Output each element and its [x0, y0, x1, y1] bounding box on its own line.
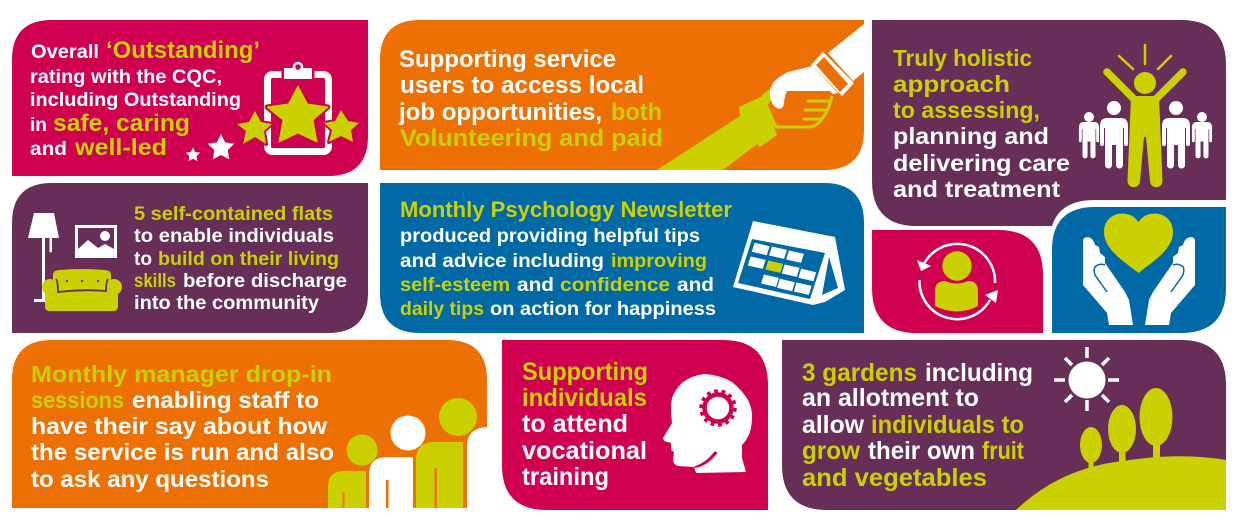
text: gardens — [802, 359, 1033, 492]
text: flats: to enable individuals — [134, 226, 334, 247]
icon: person in circular arrows — [917, 244, 998, 319]
text: holistic approach: planning and — [893, 123, 1049, 149]
text: drop-in sessions: sessions — [31, 387, 124, 413]
text: CQC rating: ‘Outstanding’ — [106, 37, 260, 64]
text: flats: 5 self-contained flats — [134, 204, 333, 225]
icon: clipboard with stars — [186, 63, 359, 161]
panel: gardens — [782, 340, 1226, 510]
text: drop-in sessions: enabling staff to — [132, 387, 319, 413]
text: drop-in sessions: Monthly manager drop-in — [31, 361, 332, 387]
text: newsletter: and — [677, 274, 714, 296]
text: drop-in sessions: to ask any questions — [31, 466, 269, 492]
text: holistic approach: delivering care — [893, 150, 1070, 176]
text: newsletter: self-esteem — [400, 274, 510, 296]
text: job opportunities: both — [611, 99, 662, 126]
text: vocational training — [522, 358, 648, 491]
text: job opportunities — [398, 46, 663, 152]
panel: person cycle icon — [872, 230, 1043, 333]
text: gardens: and vegetables — [802, 464, 987, 492]
text: flats: before discharge — [183, 271, 347, 292]
text: CQC rating: safe, caring — [53, 110, 190, 137]
panel: psychology newsletter — [380, 183, 864, 333]
text: newsletter: Monthly Psychology Newsletter — [400, 197, 732, 222]
icon: trees on hill — [1016, 388, 1226, 510]
text: gardens: fruit — [982, 437, 1025, 465]
text: CQC rating: including Outstanding — [30, 89, 241, 111]
text: newsletter: improving — [611, 250, 707, 272]
icon: queue of people — [328, 398, 487, 508]
text: holistic approach — [893, 45, 1070, 202]
panel: vocational training — [502, 340, 768, 510]
text: drop-in sessions: have their say about how — [31, 413, 327, 439]
panel: caring hands icon — [1052, 207, 1226, 333]
text: gardens: allow — [802, 411, 865, 439]
text: gardens: individuals to — [871, 411, 1024, 439]
icon: desk calendar — [733, 221, 845, 305]
text: CQC rating: well-led — [74, 134, 167, 160]
text: gardens: including — [925, 359, 1033, 387]
text: holistic approach: approach — [893, 71, 1010, 97]
panel: outstanding CQC rating — [12, 20, 368, 176]
icon: lamp, picture and sofa — [28, 213, 122, 311]
text: job opportunities: Supporting service — [399, 46, 616, 73]
text: holistic approach: Truly holistic — [893, 45, 1032, 71]
text: CQC rating — [30, 37, 260, 160]
text: CQC rating: rating with the CQC, — [30, 66, 222, 88]
text: holistic approach: to assessing, — [893, 97, 1040, 123]
text: job opportunities: users to access local — [400, 72, 644, 99]
text: job opportunities: Volunteering and paid — [400, 125, 663, 152]
panel: job opportunities — [380, 20, 864, 170]
text: CQC rating: and — [30, 138, 67, 160]
text: newsletter: daily tips — [400, 298, 484, 320]
text: vocational training: to attend — [522, 410, 628, 438]
text: flats: to — [134, 249, 152, 270]
text: flats: build on their living — [158, 249, 339, 270]
text: newsletter: confidence — [560, 274, 670, 296]
panel: self-contained flats — [12, 183, 368, 333]
text: newsletter: and advice including — [400, 250, 604, 272]
text: gardens: an allotment to — [802, 384, 979, 412]
text: vocational training: Supporting — [522, 358, 648, 386]
icon: sun — [1054, 347, 1119, 411]
icon: hands holding heart — [1083, 214, 1195, 325]
text: flats — [134, 204, 347, 314]
icon: handshake arm — [657, 24, 864, 170]
text: flats: into the community — [134, 293, 319, 314]
icon: group of people with raised figure — [1079, 45, 1212, 187]
panel: holistic approach — [872, 20, 1226, 226]
icon: head with gear — [663, 374, 752, 473]
text: vocational training: training — [522, 463, 609, 491]
panel: manager drop-in sessions — [12, 340, 487, 508]
text: vocational training: vocational — [522, 437, 647, 465]
text: newsletter — [400, 197, 732, 320]
text: gardens: 3 gardens — [802, 359, 917, 387]
text: drop-in sessions — [31, 361, 334, 492]
text: vocational training: individuals — [522, 384, 647, 412]
text: gardens: grow — [802, 437, 861, 465]
text: job opportunities: job opportunities, — [398, 99, 602, 126]
text: newsletter: on action for happiness — [490, 298, 716, 320]
text: CQC rating: Overall — [31, 41, 99, 63]
text: gardens: their own — [868, 437, 975, 465]
text: newsletter: and — [517, 274, 554, 296]
text: flats: skills — [134, 271, 176, 292]
text: holistic approach: and treatment — [893, 176, 1060, 202]
text: CQC rating: in — [30, 114, 47, 136]
text: newsletter: produced providing helpful tips — [400, 225, 700, 247]
text: drop-in sessions: the service is run and also — [31, 439, 334, 465]
